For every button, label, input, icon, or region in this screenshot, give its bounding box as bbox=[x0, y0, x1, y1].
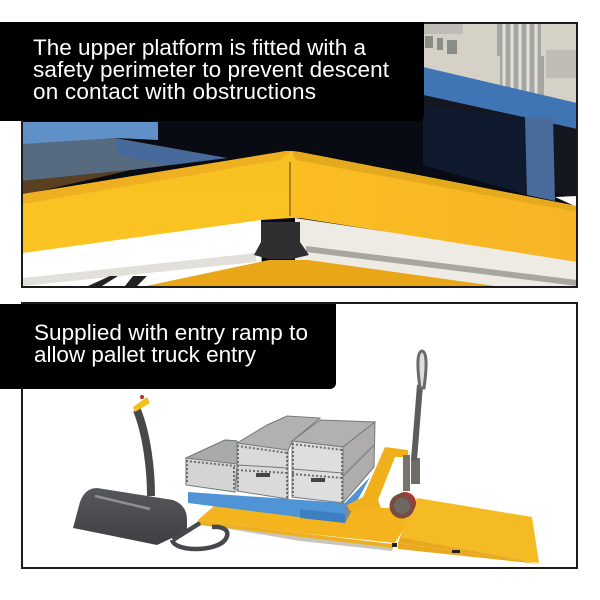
lower yellow deck bbox=[146, 260, 495, 286]
white lower rail bbox=[23, 218, 577, 286]
blue pallet bbox=[188, 477, 370, 523]
panel: upper platform photo bbox=[21, 22, 578, 288]
callout text: The upper platform is fitted with a bbox=[33, 35, 366, 60]
lift table with ramp bbox=[198, 498, 539, 564]
callout text: Supplied with entry ramp to bbox=[34, 320, 308, 345]
stacked grey crates bbox=[186, 416, 375, 503]
tethered control hood bbox=[73, 395, 227, 549]
callout: entry ramp bbox=[0, 304, 336, 389]
callout text: allow pallet truck entry bbox=[34, 342, 257, 367]
pallet truck bbox=[347, 351, 426, 518]
black bumper foot bbox=[254, 222, 309, 259]
callout text: safety perimeter to prevent descent bbox=[33, 57, 390, 82]
yellow platform bar bbox=[23, 151, 577, 262]
callout: upper platform bbox=[0, 22, 424, 121]
panel: pallet truck photo bbox=[22, 303, 577, 568]
photo: platform corner close-up bbox=[23, 24, 577, 286]
callout text: on contact with obstructions bbox=[33, 79, 316, 104]
